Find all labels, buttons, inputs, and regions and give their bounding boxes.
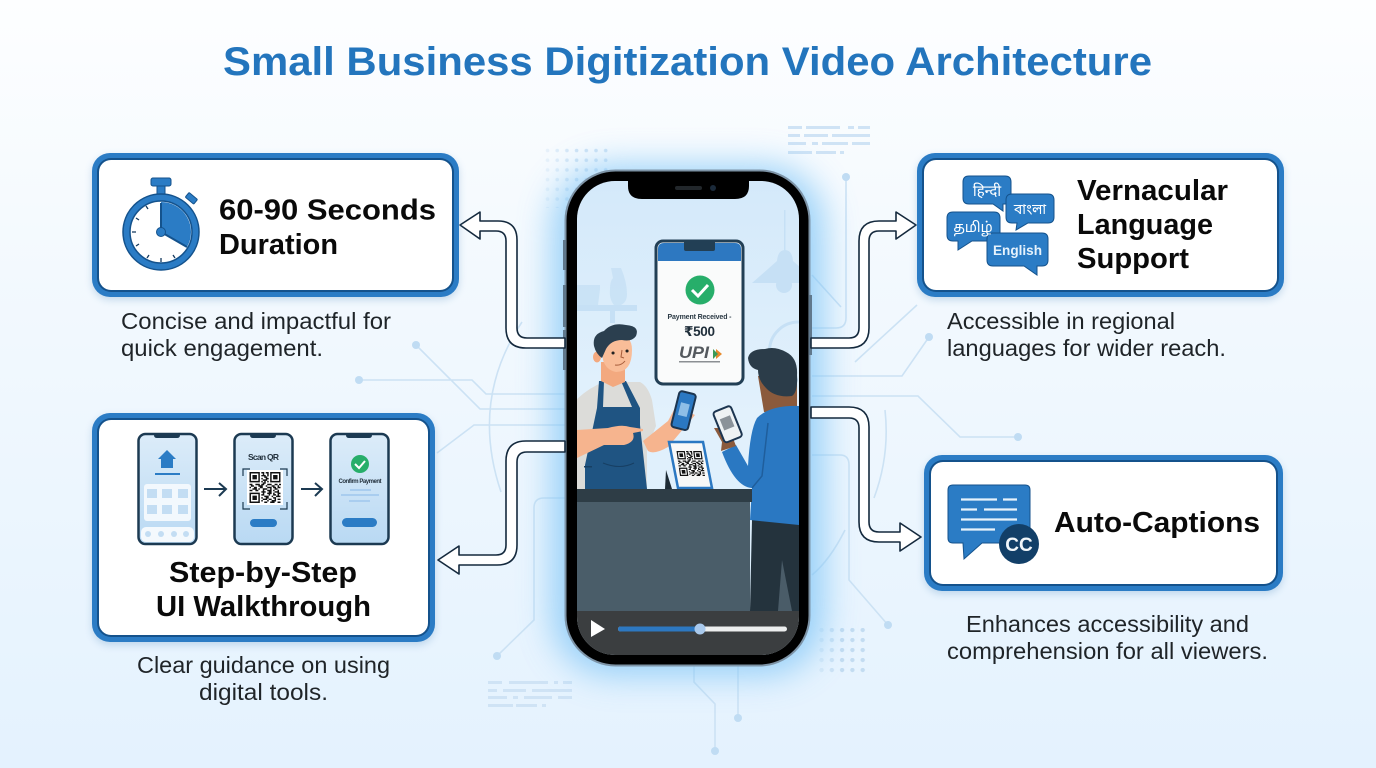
icon: language speech bubbles (947, 176, 1054, 275)
panel: 60-90 seconds duration (92, 153, 459, 300)
text: duration description: quick engagement. (121, 335, 323, 361)
QR stand on counter (665, 442, 712, 489)
icon: scan QR phone (234, 433, 292, 544)
payment received mini phone: ₹500 (684, 324, 715, 339)
payment received mini phone: Payment Received - (668, 314, 732, 321)
icon: confirm payment phone: Confirm Payment (338, 479, 382, 485)
arrow: phone to UI walkthrough (438, 441, 565, 574)
icon: language speech bubbles: हिन्दी (973, 183, 1002, 203)
text: language description: Accessible in regional (947, 308, 1175, 334)
arrow: phone to auto-captions (811, 407, 921, 551)
text: language description (947, 308, 1226, 361)
heading: Step-by-Step (169, 557, 357, 589)
counter (577, 489, 752, 611)
icon: language speech bubbles: বাংলা (1013, 201, 1046, 220)
arrow: step one to two (204, 483, 226, 496)
icon: caption bubble with CC badge (948, 485, 1039, 564)
heading: UI Walkthrough (156, 591, 371, 623)
heading: Auto-Captions (1054, 507, 1260, 539)
icon: home screen phone (138, 433, 196, 544)
icon: language speech bubbles: தமிழ் (953, 220, 993, 238)
heading: Duration (219, 229, 338, 261)
icon: caption bubble with CC badge: CC (1005, 535, 1033, 556)
arrow: phone to 60-90 seconds (460, 212, 565, 348)
phone screen scene (577, 181, 818, 655)
title: Small Business Digitization Video Architecture (223, 40, 1152, 84)
heading: 60-90 Seconds (219, 194, 436, 226)
shopkeeper (577, 324, 696, 489)
arrow: step two to three (301, 483, 322, 496)
text: walkthrough description (137, 652, 390, 705)
icon: language speech bubbles: English (993, 242, 1042, 258)
phone glow (552, 165, 824, 675)
phone notch (628, 181, 749, 199)
heading (219, 194, 436, 261)
background circuit lines and data motifs (355, 126, 1022, 755)
icon: confirm payment phone (330, 433, 388, 544)
text: captions description (947, 611, 1268, 664)
text: captions description: comprehension for all viewers. (947, 638, 1268, 664)
panel: vernacular language support (917, 153, 1284, 300)
payment received mini phone: UPI (679, 343, 710, 362)
customer (713, 348, 799, 611)
text: duration description (121, 308, 391, 361)
heading: Language (1077, 209, 1213, 241)
text: walkthrough description: Clear guidance on using (137, 652, 390, 678)
phone body (566, 170, 810, 666)
panel: auto-captions (924, 455, 1283, 594)
payment received mini phone (656, 241, 743, 384)
heading (1077, 175, 1228, 275)
text: duration description: Concise and impactful for (121, 308, 391, 334)
icon: scan QR phone: Scan QR (248, 452, 279, 462)
icon: stopwatch (123, 178, 199, 270)
heading: Vernacular (1077, 175, 1228, 207)
shelf with bowl and vase (577, 268, 637, 323)
central smartphone (552, 165, 824, 675)
panel: step-by-step UI walkthrough (92, 413, 435, 645)
arrow: phone to vernacular support (811, 212, 916, 348)
hanging lamp (752, 210, 799, 382)
heading (156, 557, 371, 623)
text: language description: languages for wider reach. (947, 335, 1226, 361)
heading: Support (1077, 243, 1189, 275)
text: captions description: Enhances accessibility and (966, 611, 1249, 637)
text: walkthrough description: digital tools. (199, 679, 328, 705)
video player controls (577, 611, 799, 655)
